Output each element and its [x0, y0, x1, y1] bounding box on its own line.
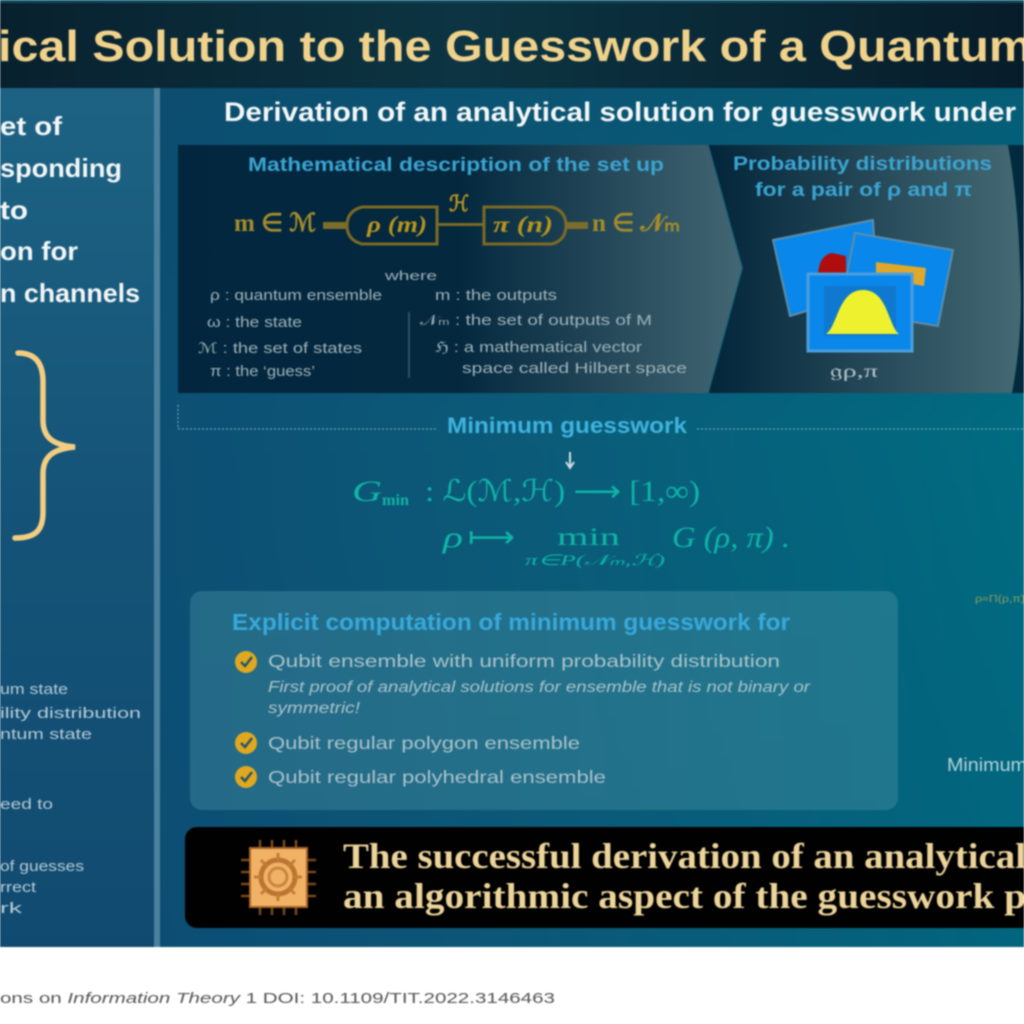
- intro text: et of: [0, 111, 62, 141]
- legend left: ℳ : the set of states: [198, 341, 362, 357]
- section divider: minimum guesswork: [178, 405, 1024, 468]
- intro text: n channels: [0, 278, 140, 308]
- heading: probability: Probability distributions: [733, 154, 992, 175]
- right side fragments: ρ≈Π(ρ,π): [975, 594, 1024, 605]
- formula: minimum guesswork definition: [352, 475, 790, 569]
- chart: stacked distribution cards: [773, 220, 953, 381]
- definitions text: ntum state: [0, 726, 92, 743]
- callout: conclusion bar: The successful derivation of an analytical: [343, 836, 1024, 876]
- formula: minimum guesswork definition: : ℒ(ℳ,ℋ) ⟶ [1,∞): [425, 475, 700, 508]
- intro text: to: [0, 195, 28, 225]
- intro text: on for: [0, 236, 78, 266]
- title banner: ical Solution to the Guesswork of a Quantum: [0, 22, 1024, 71]
- legend left: π : the ‘guess’: [210, 364, 315, 380]
- legend right: 𝒩ₘ : the set of outputs of M: [420, 313, 652, 329]
- formula: minimum guesswork definition: G: [352, 475, 382, 508]
- formula: minimum guesswork definition: min: [557, 524, 621, 551]
- definitions text: um state: [0, 681, 68, 698]
- definitions text: ility distribution: [0, 705, 141, 722]
- formula: minimum guesswork definition: π∈P(𝒩ₘ,ℋ): [525, 553, 665, 569]
- panel: explicit computation: [190, 591, 898, 810]
- legend left: [198, 288, 382, 380]
- right side fragments: [947, 594, 1024, 775]
- check item: polygon ensemble: Qubit regular polygon ensemble: [268, 733, 580, 753]
- arrow: down to formula: [566, 452, 574, 468]
- definitions text: rk: [0, 900, 23, 917]
- heading: explicit computation: Explicit computation of minimum guesswork for: [232, 609, 790, 635]
- intro text: [0, 111, 140, 308]
- check item: uniform ensemble: First proof of analytical solutions for ensemble that is not binary or: [268, 679, 811, 696]
- legend right: [420, 288, 687, 377]
- quantum channel diagram: ρ (m): [366, 212, 427, 237]
- citation footer: ons on Information Theory 1 DOI: 10.1109/TIT.2022.3146463: [0, 990, 555, 1007]
- heading: set up: Mathematical description of the set up: [248, 155, 664, 176]
- chart: stacked distribution cards: 𝔤ρ,π: [830, 361, 878, 381]
- definitions text: of guesses: [0, 858, 84, 875]
- heading: probability: for a pair of ρ and π: [755, 180, 973, 201]
- formula: minimum guesswork definition: ⟼: [468, 521, 515, 554]
- callout: conclusion bar: [185, 827, 1024, 928]
- quantum channel diagram: m ∈ ℳ: [234, 210, 316, 237]
- check item: polyhedral ensemble: [235, 766, 606, 788]
- panel: mathematical description: [178, 145, 742, 393]
- check item: uniform ensemble: [235, 651, 811, 717]
- check item: uniform ensemble: Qubit ensemble with uniform probability distribution: [268, 651, 780, 671]
- definitions text: [0, 681, 141, 917]
- legend left: ρ : quantum ensemble: [210, 288, 382, 304]
- quantum channel diagram: ℋ: [449, 191, 469, 216]
- panel: probability distributions: [709, 145, 1024, 393]
- right side fragments: Minimum: [947, 755, 1024, 775]
- heading: derivation: Derivation of an analytical solution for guesswork under: [224, 97, 1017, 127]
- legend left: ω : the state: [207, 315, 302, 331]
- heading: probability: [733, 154, 992, 201]
- legend right: space called Hilbert space: [462, 361, 687, 377]
- quantum channel diagram: [234, 191, 680, 244]
- definitions text: rrect: [0, 879, 37, 896]
- quantum channel diagram: π (n): [493, 212, 553, 237]
- section divider: minimum guesswork: Minimum guesswork: [447, 413, 688, 438]
- callout: conclusion bar: an algorithmic aspect of the guesswork p: [343, 876, 1024, 916]
- check item: polyhedral ensemble: Qubit regular polyhedral ensemble: [268, 767, 606, 787]
- definitions text: eed to: [0, 796, 53, 813]
- check item: polygon ensemble: [235, 732, 580, 754]
- icon: curly brace: [15, 353, 75, 538]
- legend right: ℌ : a mathematical vector: [435, 340, 642, 356]
- icon: chip: [241, 840, 316, 915]
- formula: minimum guesswork definition: G (ρ, π) .: [672, 521, 790, 554]
- panel: left column: [0, 88, 160, 947]
- where label: where: [384, 268, 437, 283]
- formula: minimum guesswork definition: min: [382, 492, 409, 509]
- legend right: m : the outputs: [435, 288, 557, 304]
- formula: minimum guesswork definition: ρ: [442, 521, 463, 554]
- title banner: [0, 0, 1024, 88]
- intro text: sponding: [0, 153, 122, 183]
- check item: uniform ensemble: symmetric!: [268, 700, 361, 717]
- quantum channel diagram: n ∈ 𝒩ₘ: [592, 210, 680, 237]
